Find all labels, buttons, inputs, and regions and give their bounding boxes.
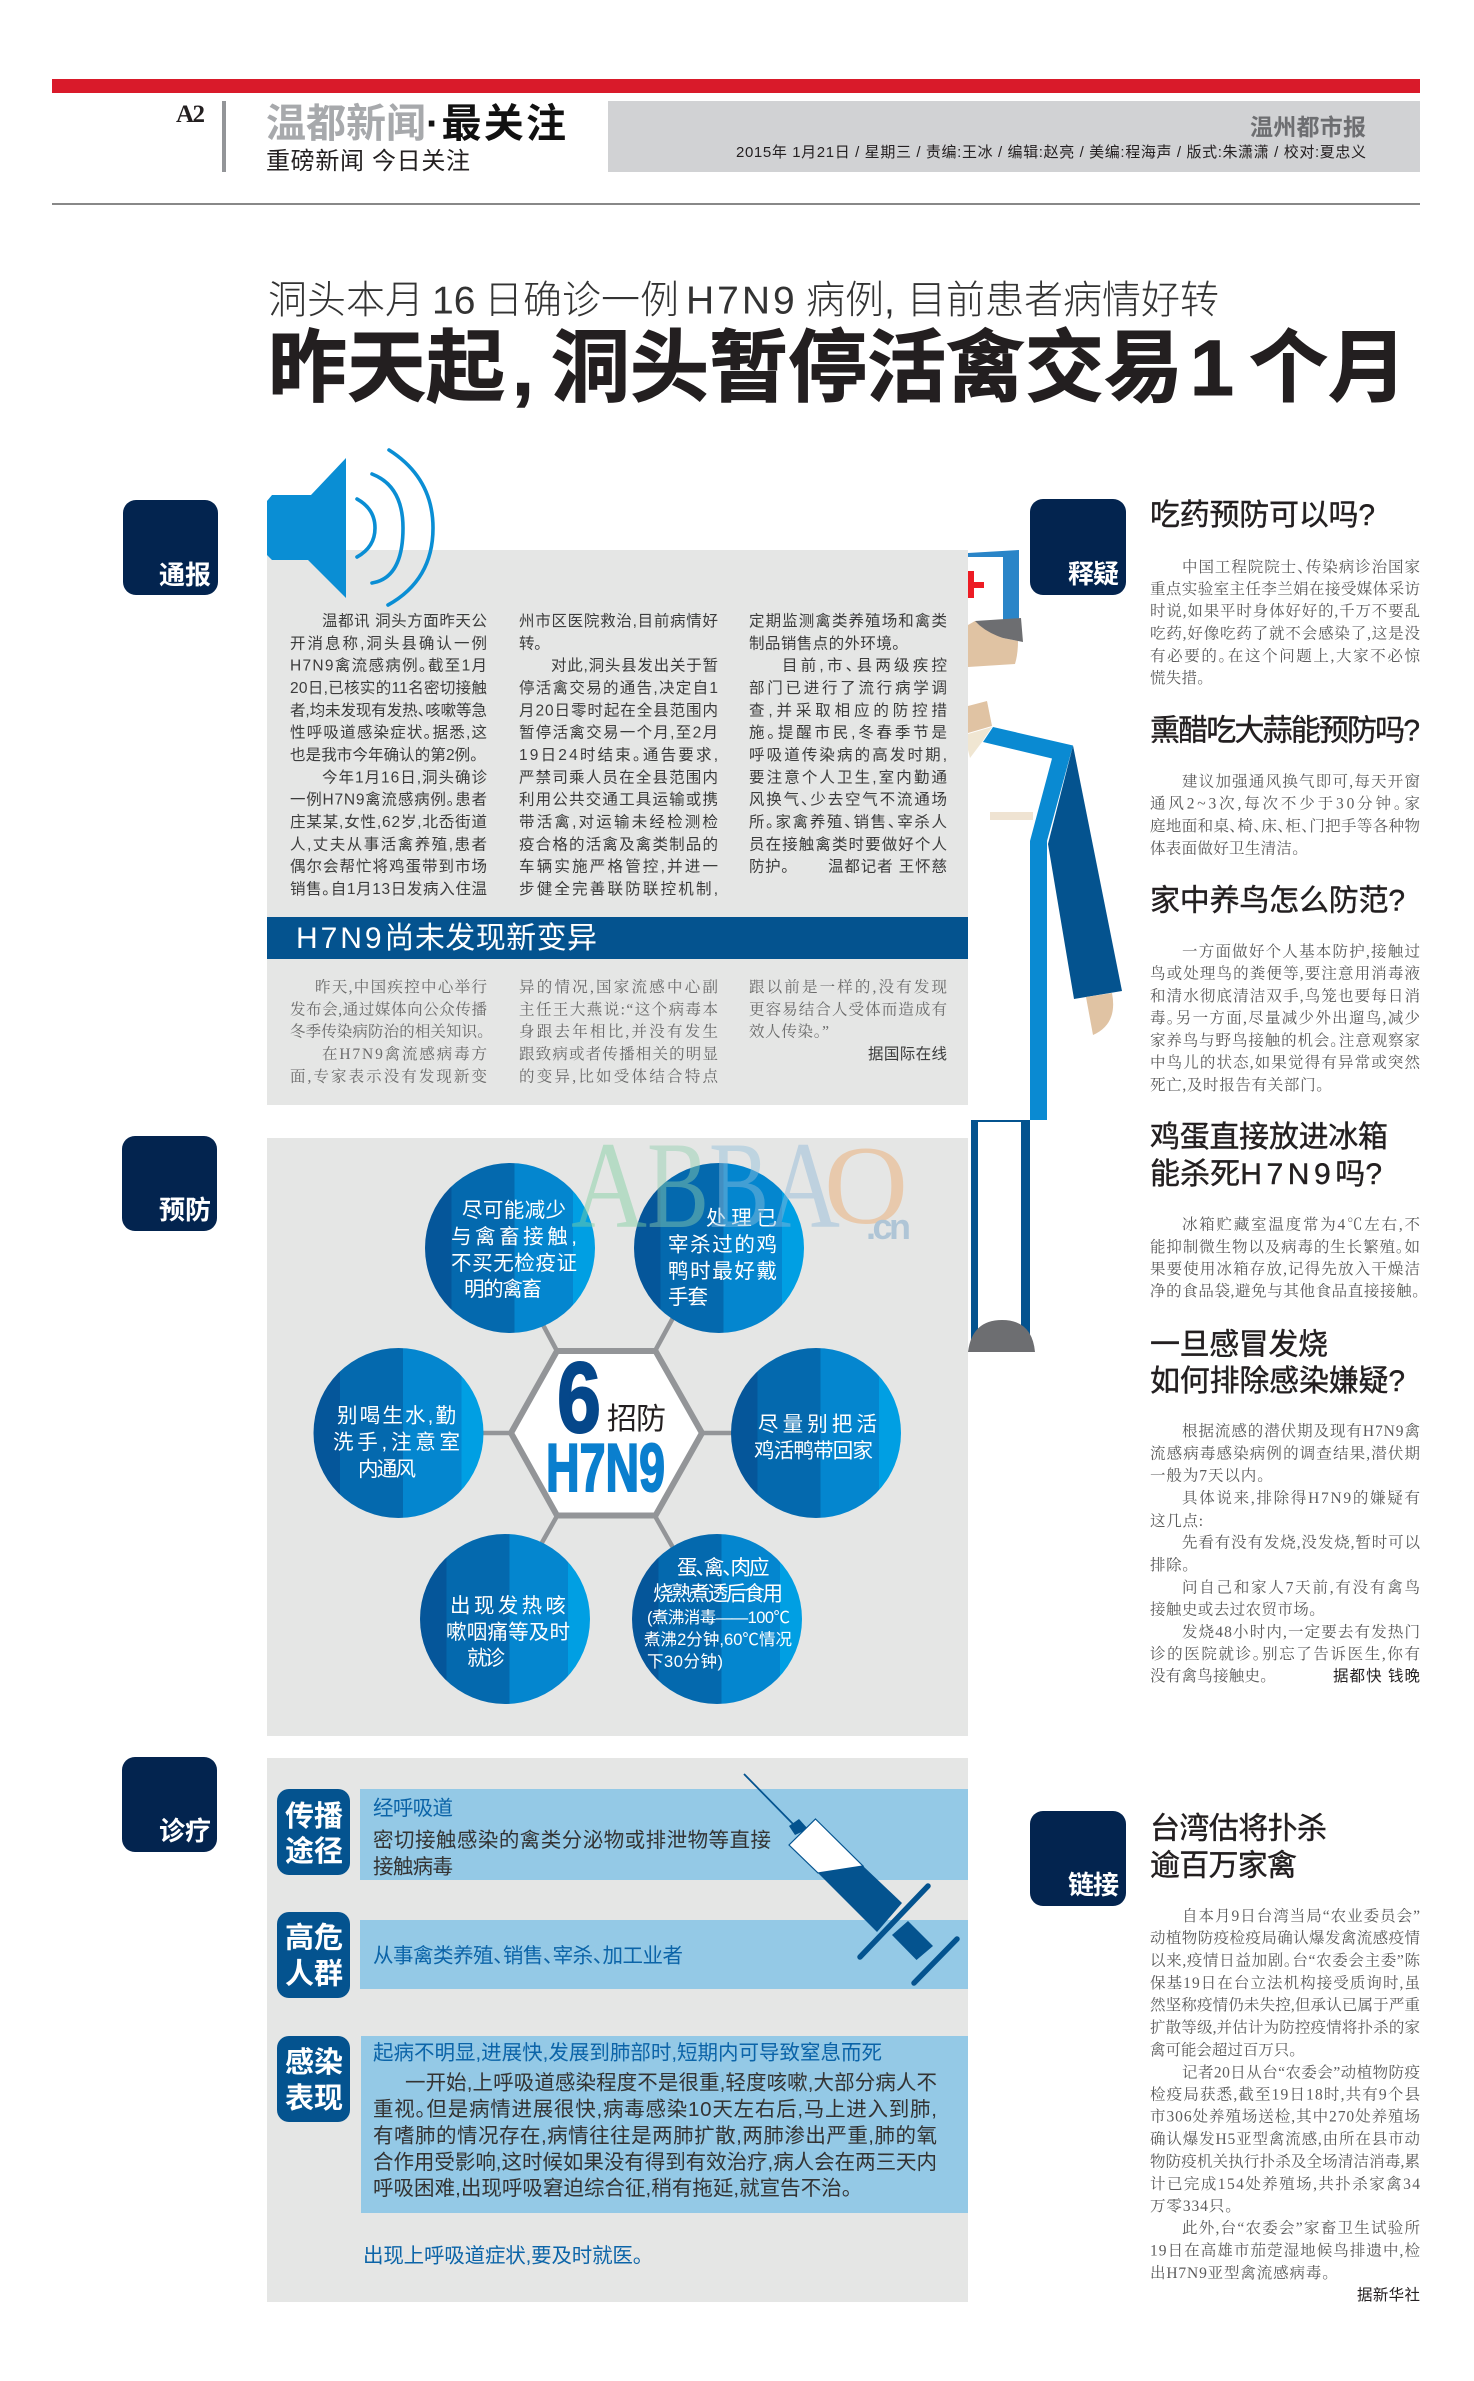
body columns: 制品销售点的外环境。 xyxy=(749,633,900,652)
tip circle 1 xyxy=(425,1163,595,1333)
tip circle 5: 嗽咽痛等及时 xyxy=(446,1621,570,1644)
lower text columns: 的变异,比如受体结合特点 xyxy=(519,1067,718,1085)
lower text columns: 在H7N9禽流感病毒方 xyxy=(322,1045,487,1063)
body columns: 对此,洞头县发出关于暂 xyxy=(551,657,718,675)
subtitle: H7N9 xyxy=(686,280,798,322)
row: symptoms: 呼吸困难,出现呼吸窘迫综合征,稍有拖延,就宣告不治。 xyxy=(373,2177,852,2200)
row: symptoms: 起病不明显,进展快,发展到肺部时,短期内可导致窒息而死 xyxy=(373,2042,882,2065)
body columns: 庄某某,女性,62岁,北岙街道 xyxy=(290,812,487,831)
body columns: 施。提醒市民,冬春季节是 xyxy=(749,724,947,742)
answer: 接触史或去过农贸市场。 xyxy=(1150,1601,1317,1619)
tip circle 3: 内通风 xyxy=(358,1458,416,1481)
source credit: 据都快 钱晚 xyxy=(1333,1667,1420,1685)
vertical divider xyxy=(222,101,226,172)
article body: 物防疫机关执行扑杀及全场清洁消毒,累 xyxy=(1150,2153,1420,2171)
tip circle 2: 手套 xyxy=(668,1286,708,1309)
tip circle 2 xyxy=(634,1163,804,1333)
tip circle 6: 烧熟煮透后食用 xyxy=(653,1583,783,1606)
heading: 鸡蛋直接放进冰箱 xyxy=(1150,1121,1388,1154)
hair xyxy=(975,618,1023,642)
pocket xyxy=(990,812,1033,820)
article body: 然坚称疫情仍未失控,但承认已属于严重 xyxy=(1150,1996,1420,2014)
red top bar xyxy=(52,79,1420,93)
answer: 流感病毒感染病例的调查结果,潜伏期 xyxy=(1150,1444,1420,1462)
Q and A 5 xyxy=(1150,1328,1421,1685)
body columns: 温都记者 王怀慈 xyxy=(828,858,947,876)
answer: 鸟或处理鸟的粪便等,要注意用消毒液 xyxy=(1150,964,1420,982)
article body: 出H7N9亚型禽流感病毒。 xyxy=(1150,2264,1330,2282)
icon: syringe xyxy=(744,1774,957,1983)
body columns: 20日,已核实的11名密切接触 xyxy=(290,679,487,697)
answer xyxy=(1150,942,1420,1094)
lower text columns xyxy=(290,978,947,1085)
answer: 果要使用冰箱存放,记得先放入干燥洁 xyxy=(1150,1260,1420,1278)
answer: 死亡,及时报告有关部门。 xyxy=(1150,1075,1324,1094)
red cross xyxy=(968,571,984,598)
article body: 万零334只。 xyxy=(1150,2197,1233,2215)
badge: 释疑: 释疑 xyxy=(1068,559,1119,589)
tip circle 6: 蛋、禽、肉应 xyxy=(677,1556,770,1580)
heading: 一旦感冒发烧 xyxy=(1150,1328,1328,1361)
page number: A2 xyxy=(176,101,205,128)
subtitle: 病例, xyxy=(806,280,895,322)
answer: 根据流感的潜伏期及现有H7N9禽 xyxy=(1182,1422,1420,1440)
answer: 有必要的。在这个问题上,大家不必惊 xyxy=(1150,647,1420,665)
lower text columns: 更容易结合人受体而造成有 xyxy=(749,1000,947,1018)
Q and A 1 xyxy=(1150,499,1420,687)
answer: 家养鸟与野鸟接触的机会。注意观察家 xyxy=(1150,1032,1420,1050)
badge: 诊疗 xyxy=(122,1757,217,1852)
body columns: 呼吸道传染病的高发时期, xyxy=(749,746,947,764)
answer: 中鸟儿的状态,如果觉得有异常或突然 xyxy=(1150,1054,1420,1072)
heading: 如何排除感染嫌疑? xyxy=(1150,1365,1405,1398)
article body: 确认爆发H5亚型禽流感,由所在县市动 xyxy=(1150,2130,1420,2148)
tip circle 1: 明的禽畜 xyxy=(464,1278,542,1301)
section title: ·最关注 xyxy=(426,102,566,146)
tip circle 3 xyxy=(314,1348,484,1518)
Q and A 2 xyxy=(1150,714,1420,858)
grey info box xyxy=(608,101,1420,172)
answer: 和清水彻底清洁双手,鸟笼也要每日消 xyxy=(1150,986,1420,1005)
main title: 昨天起 xyxy=(268,323,505,412)
heading xyxy=(1150,1121,1388,1191)
answer: 时说,如果平时身体好好的,千万不要乱 xyxy=(1150,602,1420,620)
body columns: 定期监测禽类养殖场和禽类 xyxy=(749,612,947,630)
heading: 逾百万家禽 xyxy=(1150,1849,1297,1882)
nurse cap xyxy=(968,550,1019,620)
connectors xyxy=(470,1305,745,1560)
link article: Taiwan xyxy=(1150,1812,1420,2304)
badge: 链接 xyxy=(1030,1811,1126,1906)
source credit: 据国际在线 xyxy=(868,1045,947,1063)
row: symptoms: 有嗜肺的情况存在,病情往往是两肺扩散,两肺渗出严重,肺的氧 xyxy=(373,2125,937,2148)
hand xyxy=(1086,993,1113,1035)
answer: 没有禽鸟接触史。 xyxy=(1150,1667,1268,1685)
body columns: 部门已进行了流行病学调 xyxy=(749,679,947,697)
body columns: 要注意个人卫生,室内勤通 xyxy=(749,767,947,786)
body columns: 偶尔会帮忙将鸡蛋带到市场 xyxy=(290,858,487,876)
tip circle 5: 就诊 xyxy=(467,1647,506,1670)
answer: 重点实验室主任李兰娟在接受媒体采访 xyxy=(1150,580,1420,598)
icon: loudspeaker xyxy=(267,450,433,605)
figure: nurse xyxy=(968,550,1122,1352)
watermark: B xyxy=(709,1117,769,1254)
tip circle 6: 下30分钟) xyxy=(647,1652,723,1671)
tip circle 2: 宰杀过的鸡 xyxy=(668,1234,777,1256)
answer: 发烧48小时内,一定要去有发热门 xyxy=(1182,1623,1420,1641)
body columns: 员在接触禽类时要做好个人 xyxy=(749,835,947,853)
body columns: 一例H7N9禽流感病例。患者 xyxy=(290,791,487,809)
body columns: 州市区医院救治,目前病情好 xyxy=(519,611,718,630)
lower text columns: 昨天,中国疾控中心举行 xyxy=(315,978,487,996)
article body: 动植物防疫检疫局确认爆发禽流感疫情 xyxy=(1150,1929,1420,1947)
lower text columns: 发布会,通过媒体向公众传播 xyxy=(290,1000,487,1018)
row: symptoms: 重视。但是病情进展很快,病毒感染10天左右后,马上进入到肺, xyxy=(373,2098,937,2121)
answer: 先看有没有发烧,没发烧,暂时可以 xyxy=(1182,1534,1421,1552)
article body xyxy=(1150,1907,1420,2282)
answer: 能抑制微生物以及病毒的生长繁殖。如 xyxy=(1150,1238,1420,1256)
answer: 毒。另一方面,尽量减少外出遛鸟,减少 xyxy=(1150,1009,1420,1027)
badge: 诊疗: 诊疗 xyxy=(159,1816,211,1846)
article body: 记者20日从台“农委会”动植物防疫 xyxy=(1182,2063,1420,2081)
source credit: 据新华社 xyxy=(1357,2286,1420,2304)
subtitle: 目前患者病情好转 xyxy=(907,280,1219,322)
body columns: 严禁司乘人员在全县范围内 xyxy=(519,768,718,786)
centre hexagon: H7N9 xyxy=(546,1430,665,1506)
body columns: 所。家禽养殖、销售、宰杀人 xyxy=(749,813,947,831)
row: transmission: 密切接触感染的禽类分泌物或排泄物等直接 xyxy=(373,1829,771,1852)
tip circle 3: 洗手,注意室 xyxy=(333,1431,460,1454)
answer: 诊的医院就诊。别忘了告诉医生,你有 xyxy=(1150,1645,1420,1663)
body columns: 19日24时结束。通告要求, xyxy=(519,746,718,764)
row: high-risk groups: 人群 xyxy=(285,1958,343,1990)
answer: 排除。 xyxy=(1150,1556,1190,1574)
Q and A 3 xyxy=(1150,884,1420,1094)
answer: 中国工程院院士、传染病诊治国家 xyxy=(1182,558,1420,576)
row: transmission: 途径 xyxy=(285,1835,343,1868)
headline block xyxy=(268,280,1407,412)
face xyxy=(968,621,1018,667)
section title xyxy=(266,102,566,146)
answer: 吃药,好像吃药了就不会感染了,这是没 xyxy=(1150,625,1420,643)
tip circle 5 xyxy=(420,1534,590,1704)
tip circle 4: 尽量别把活 xyxy=(758,1413,877,1436)
answer: 一般为7天以内。 xyxy=(1150,1467,1265,1485)
badge: 通报: 通报 xyxy=(159,560,211,590)
heading: 能杀死H7N9吗? xyxy=(1150,1158,1382,1191)
subtitle: 日确诊一例 xyxy=(484,280,679,322)
body columns: 利用公共交通工具运输或携 xyxy=(519,791,718,809)
body columns: 转。 xyxy=(519,634,542,652)
grey info box: 2015年 1月21日 / 星期三 / 责编:王冰 / 编辑:赵亮 / 美编:程海声 / 版式:朱潇潇 / 校对:夏忠义 xyxy=(736,143,1366,161)
row: transmission: 接触病毒 xyxy=(373,1856,453,1879)
badge: 链接: 链接 xyxy=(1068,1870,1119,1900)
watermark: O xyxy=(824,1124,908,1248)
tip circle 1: 尽可能减少 xyxy=(462,1199,566,1222)
body columns: 今年1月16日,洞头确诊 xyxy=(322,768,487,786)
watermark xyxy=(571,1117,911,1254)
lower text columns: 面,专家表示没有发现新变 xyxy=(290,1066,487,1085)
heading: 吃药预防可以吗? xyxy=(1150,499,1375,532)
article body: 自本月9日台湾当局“农业委员会” xyxy=(1182,1907,1420,1925)
watermark: .cn xyxy=(866,1206,911,1247)
row: transmission: 经呼吸道 xyxy=(373,1797,453,1820)
lower text columns: 跟以前是一样的,没有发现 xyxy=(749,978,947,996)
heading: 台湾估将扑杀 xyxy=(1150,1812,1327,1845)
answer: 体表面做好卫生清洁。 xyxy=(1150,839,1300,858)
badge: 预防: 预防 xyxy=(159,1195,211,1225)
answer xyxy=(1150,558,1420,687)
row: symptoms: 合作用受影响,这时候如果没有得到有效治疗,病人会在两三天内 xyxy=(373,2151,937,2174)
article body: 此外,台“农委会”家畜卫生试验所 xyxy=(1182,2219,1420,2237)
section subtitle: 重磅新闻 今日关注 xyxy=(266,148,470,175)
tip circle 4: 鸡活鸭带回家 xyxy=(754,1440,873,1462)
row: transmission: 传播 xyxy=(285,1800,343,1833)
answer: 具体说来,排除得H7N9的嫌疑有 xyxy=(1182,1488,1420,1507)
heading xyxy=(1150,1812,1327,1882)
sub-heading bar: H7N9尚未发现新变异 xyxy=(296,922,597,955)
main title: 1 xyxy=(1190,323,1234,412)
tip circle 6 xyxy=(632,1534,802,1704)
body columns: 步健全完善联防联控机制, xyxy=(519,880,718,898)
main title: 洞头暂停活禽交易 xyxy=(551,323,1183,412)
collar xyxy=(968,727,992,758)
body columns: 人,丈夫从事活禽养殖,患者 xyxy=(290,835,487,853)
article body: 禽可能会超过百万只。 xyxy=(1150,2040,1297,2059)
answer: 慌失措。 xyxy=(1150,669,1205,687)
answer: 通风2~3次,每次不少于30分钟。家 xyxy=(1150,795,1420,813)
answer xyxy=(1150,1422,1421,1685)
lower text columns: 身跟去年相比,并没有发生 xyxy=(519,1022,718,1041)
grey info box: 温州都市报 xyxy=(1250,114,1366,140)
body columns: 也是我市今年确认的第2例。 xyxy=(290,746,478,764)
badge: 预防 xyxy=(122,1136,217,1231)
body columns: 疫合格的活禽及禽类制品的 xyxy=(519,835,718,853)
sleeve xyxy=(1048,746,1122,999)
body columns: 温都讯 洞头方面昨天公 xyxy=(322,612,487,630)
watermark: A xyxy=(768,1117,840,1254)
trousers xyxy=(971,1120,1030,1340)
answer: 庭地面和桌、椅、床、柜、门把手等各种物 xyxy=(1150,816,1420,835)
heading: 家中养鸟怎么防范? xyxy=(1150,884,1405,917)
advice line: 出现上呼吸道症状,要及时就医。 xyxy=(363,2244,643,2268)
answer: 建议加强通风换气即可,每天开窗 xyxy=(1182,772,1420,790)
heading: 熏醋吃大蒜能预防吗? xyxy=(1150,714,1420,747)
Q and A 4 xyxy=(1150,1121,1420,1300)
shoe xyxy=(968,1320,1035,1352)
heading xyxy=(1150,1328,1405,1398)
badge: 通报 xyxy=(123,500,218,595)
article body: 19日在高雄市茄萣湿地候鸟排遗中,检 xyxy=(1150,2241,1420,2260)
lower text columns: 异的情况,国家流感中心副 xyxy=(519,978,718,996)
panel: six prevention tips xyxy=(267,1117,968,1736)
lower text columns: 冬季传染病防治的相关知识。 xyxy=(290,1023,485,1041)
tip circle 3: 别喝生水,勤 xyxy=(337,1405,456,1428)
row: symptoms xyxy=(277,2036,968,2213)
article body: 市306处养殖场送检,其中270处养殖场 xyxy=(1150,2108,1420,2126)
tip circle 1: 不买无检疫证 xyxy=(451,1252,577,1275)
body columns: 防护。 xyxy=(749,858,789,876)
watermark: B xyxy=(647,1117,709,1254)
row: high-risk groups xyxy=(277,1912,968,1998)
answer: 这几点: xyxy=(1150,1512,1203,1530)
panel: news report xyxy=(267,550,968,1105)
body columns: 查,并采取相应的防控措 xyxy=(749,700,947,719)
answer: 一方面做好个人基本防护,接触过 xyxy=(1182,942,1420,960)
tip circle 5: 出现发热咳 xyxy=(450,1594,566,1618)
answer xyxy=(1150,1216,1420,1300)
body columns: 者,均未发现有发热、咳嗽等急 xyxy=(290,701,487,719)
body columns: 暂停活禽交易一个月,至2月 xyxy=(519,724,718,742)
main title: 个月 xyxy=(1249,323,1407,412)
centre hexagon: 6 xyxy=(557,1342,601,1454)
panel: diagnosis xyxy=(267,1758,968,2302)
answer: 冰箱贮藏室温度常为4℃左右,不 xyxy=(1182,1216,1420,1234)
article body: 检疫局获悉,截至19日18时,共有9个县 xyxy=(1150,2085,1420,2104)
row: symptoms: 一开始,上呼吸道感染程度不是很重,轻度咳嗽,大部分病人不 xyxy=(405,2072,937,2094)
article body: 计已完成154处养殖场,共扑杀家禽34 xyxy=(1150,2175,1420,2193)
article body: 扩散等级,并估计为防控疫情将扑杀的家 xyxy=(1150,2018,1420,2036)
section title: 温都新闻 xyxy=(266,102,426,146)
masthead xyxy=(52,79,1420,175)
body columns: 性呼吸道感染症状。据悉,这 xyxy=(290,724,487,742)
row: high-risk groups: 高危 xyxy=(285,1922,343,1954)
subtitle: 16 xyxy=(432,280,475,322)
body columns: 目前,市、县两级疾控 xyxy=(782,657,947,675)
article body: 以来,疫情日益加剧。台“农委会主委”陈 xyxy=(1150,1951,1420,1970)
body columns: H7N9禽流感病例。截至1月 xyxy=(290,657,487,675)
neck xyxy=(968,701,992,733)
tip circle 2: 鸭时最好戴 xyxy=(668,1260,777,1283)
body columns: 月20日零时起在全县范围内 xyxy=(519,701,718,719)
centre hexagon: 招防 xyxy=(607,1403,666,1436)
article body: 保基19日在台立法机构接受质询时,虽 xyxy=(1150,1974,1420,1992)
row: high-risk groups: 从事禽类养殖、销售、宰杀、加工业者 xyxy=(373,1945,683,1968)
body columns: 停活禽交易的通告,决定自1 xyxy=(519,679,718,697)
subtitle: 洞头本月 xyxy=(268,280,424,322)
watermark: A xyxy=(571,1117,647,1254)
body columns: 带活禽,对运输未经检测检 xyxy=(519,813,718,831)
sub-heading bar xyxy=(267,917,968,959)
tip circle 2: 处理已 xyxy=(706,1207,777,1230)
body columns: 车辆实施严格管控,并进一 xyxy=(519,858,718,876)
tip circle 6: (煮沸消毒——100℃ xyxy=(647,1608,790,1627)
body columns: 风换气、少去空气不流通场 xyxy=(749,791,947,809)
answer: 问自己和家人7天前,有没有禽鸟 xyxy=(1182,1578,1420,1596)
answer: 净的食品袋,避免与其他食品直接接触。 xyxy=(1150,1281,1420,1300)
lower text columns: 主任王大燕说:“这个病毒本 xyxy=(519,1000,718,1018)
badge: 释疑 xyxy=(1030,499,1126,595)
row: symptoms: 感染 xyxy=(285,2046,343,2079)
main title: , xyxy=(512,323,534,412)
tip circle 1: 与禽畜接触, xyxy=(451,1226,577,1249)
lower text columns: 效人传染。” xyxy=(749,1023,829,1041)
centre hexagon xyxy=(511,1342,702,1516)
answer xyxy=(1150,772,1420,858)
body columns: 开消息称,洞头县确认一例 xyxy=(290,634,487,652)
tip circle 6: 煮沸2分钟,60℃情况 xyxy=(644,1630,792,1649)
row: symptoms: 表现 xyxy=(285,2082,343,2115)
body columns: 销售。自1月13日发病入住温 xyxy=(290,880,487,898)
coat trim xyxy=(983,727,1073,1120)
row: transmission xyxy=(277,1789,968,1880)
lower text columns: 跟致病或者传播相关的明显 xyxy=(519,1045,718,1063)
body columns xyxy=(290,611,947,898)
tip circle 4 xyxy=(731,1348,901,1518)
